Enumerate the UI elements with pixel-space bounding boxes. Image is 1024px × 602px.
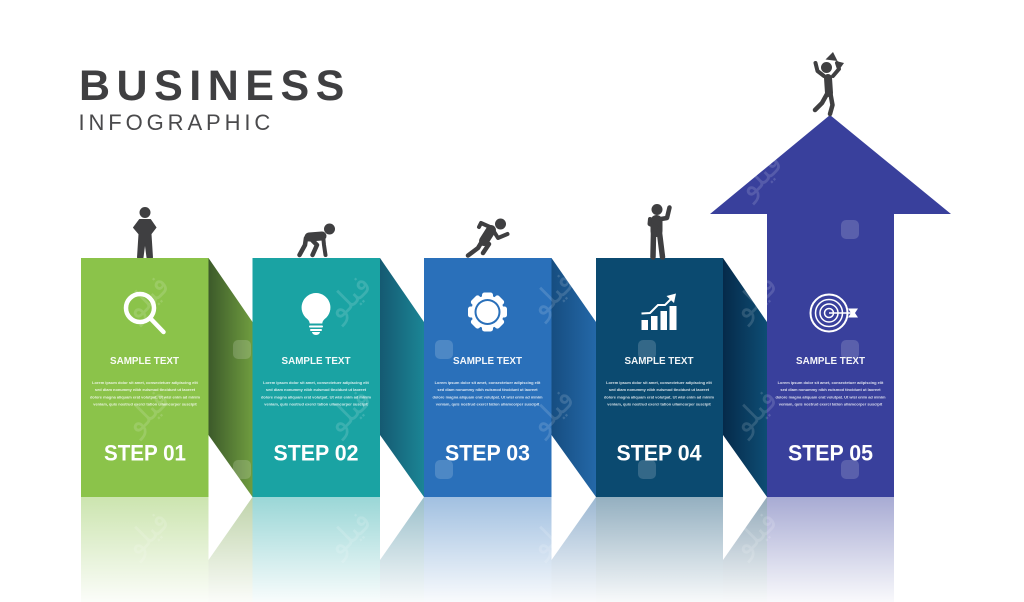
step 03 body text: veniam, quis nostrud exerci tation ullamcorper suscipit xyxy=(436,402,540,406)
step 03 body text: Lorem ipsum dolor sit amet, consectetuer adipiscing elit xyxy=(435,380,541,385)
step 02 body text: dolore magna aliquam erat volutpat. Ut wisi enim ad minim xyxy=(261,394,372,400)
icon: growth chart xyxy=(642,294,676,330)
step 02 body text: Lorem ipsum dolor sit amet, consectetuer adipiscing elit xyxy=(263,380,370,385)
icon: target xyxy=(810,294,858,332)
step 03 label: STEP 03 xyxy=(445,440,530,466)
icon: person waving xyxy=(650,204,670,257)
icon: gear xyxy=(468,292,507,332)
step 04 body text: veniam, quis nostrud exerci tation ullamcorper suscipit xyxy=(607,402,711,406)
trophy xyxy=(826,52,844,70)
watermarks: فيلو xyxy=(116,382,177,442)
step 04 body text: Lorem ipsum dolor sit amet, consectetuer adipiscing elit xyxy=(606,380,713,385)
step 03 body text xyxy=(432,380,543,406)
title xyxy=(78,62,351,135)
step 01 body text: veniam, quis nostrud exerci tation ullamcorper suscipit xyxy=(93,402,197,406)
icon: person running xyxy=(468,218,508,256)
panel: step 02 xyxy=(252,258,380,497)
panel: step 04 xyxy=(596,258,723,497)
step 02 body text xyxy=(261,380,372,406)
step 01 body text: sed diam nonummy nibh euismod tincidunt ut laoreet xyxy=(95,387,196,392)
watermarks: فيلو xyxy=(724,382,785,442)
watermarks: فيلو xyxy=(724,268,785,328)
step 03 body text: dolore magna aliquam erat volutpat. Ut wisi enim ad minim xyxy=(432,394,543,400)
panel: step 05 arrow xyxy=(710,115,951,497)
step 05 heading: SAMPLE TEXT xyxy=(796,356,865,367)
title: BUSINESS xyxy=(79,62,351,110)
step 01 body text xyxy=(90,380,201,406)
watermarks: فيلو xyxy=(318,268,379,328)
step 01 body text: dolore magna aliquam erat volutpat. Ut wisi enim ad minim xyxy=(90,394,201,400)
step 05 body text: Lorem ipsum dolor sit amet, consectetuer adipiscing elit xyxy=(778,380,884,385)
icon: person crouching at start xyxy=(300,224,335,255)
step 04 body text: sed diam nonummy nibh euismod tincidunt ut laoreet xyxy=(609,387,710,392)
step 01 body text: Lorem ipsum dolor sit amet, consectetuer adipiscing elit xyxy=(92,380,199,385)
step 02 body text: veniam, quis nostrud exerci tation ullamcorper suscipit xyxy=(264,402,368,406)
icon: light bulb xyxy=(302,293,330,335)
watermarks xyxy=(116,146,859,564)
step 04 body text xyxy=(604,380,715,406)
panel: step 01 xyxy=(81,258,208,497)
connector 2 xyxy=(380,258,424,497)
step 04 heading: SAMPLE TEXT xyxy=(624,356,694,367)
step 05 body text: dolore magna aliquam erat volutpat. Ut wisi enim ad minim xyxy=(775,394,886,400)
watermarks: فيلو xyxy=(724,504,785,564)
watermarks: فيلو xyxy=(521,382,582,442)
subtitle: INFOGRAPHIC xyxy=(78,110,274,135)
step 03 body text: sed diam nonummy nibh euismod tincidunt ut laoreet xyxy=(437,387,538,392)
step 05 body text: veniam, quis nostrud exerci tation ullamcorper suscipit xyxy=(779,402,883,406)
step 05 label: STEP 05 xyxy=(788,440,873,466)
watermarks: فيلو xyxy=(729,146,790,206)
watermarks: فيلو xyxy=(116,268,177,328)
step 01 label: STEP 01 xyxy=(104,440,186,466)
step 02 label: STEP 02 xyxy=(274,440,358,466)
step 01 heading: SAMPLE TEXT xyxy=(110,356,179,367)
step 05 body text xyxy=(775,380,886,406)
step 05 body text: sed diam nonummy nibh euismod tincidunt ut laoreet xyxy=(780,387,881,392)
icon: person with trophy xyxy=(815,52,844,114)
watermarks: فيلو xyxy=(116,504,177,564)
step 02 heading: SAMPLE TEXT xyxy=(282,356,350,367)
watermarks: فيلو xyxy=(521,265,582,325)
step 03 heading: SAMPLE TEXT xyxy=(453,356,522,367)
watermarks: فيلو xyxy=(318,382,379,442)
connector 4 xyxy=(723,258,767,497)
step 04 body text: dolore magna aliquam erat volutpat. Ut wisi enim ad minim xyxy=(604,394,715,400)
icon: person standing, hands on hips xyxy=(134,208,156,258)
panel: step 03 xyxy=(424,258,552,497)
step 02 body text: sed diam nonummy nibh euismod tincidunt ut laoreet xyxy=(266,387,367,392)
connector 1 xyxy=(208,258,252,497)
icon: magnifying glass xyxy=(126,294,164,332)
step 04 label: STEP 04 xyxy=(616,440,702,466)
connector 3 xyxy=(552,258,596,497)
reflections of columns and connectors xyxy=(0,497,1024,602)
watermarks: فيلو xyxy=(521,504,582,564)
watermarks: فيلو xyxy=(318,504,379,564)
